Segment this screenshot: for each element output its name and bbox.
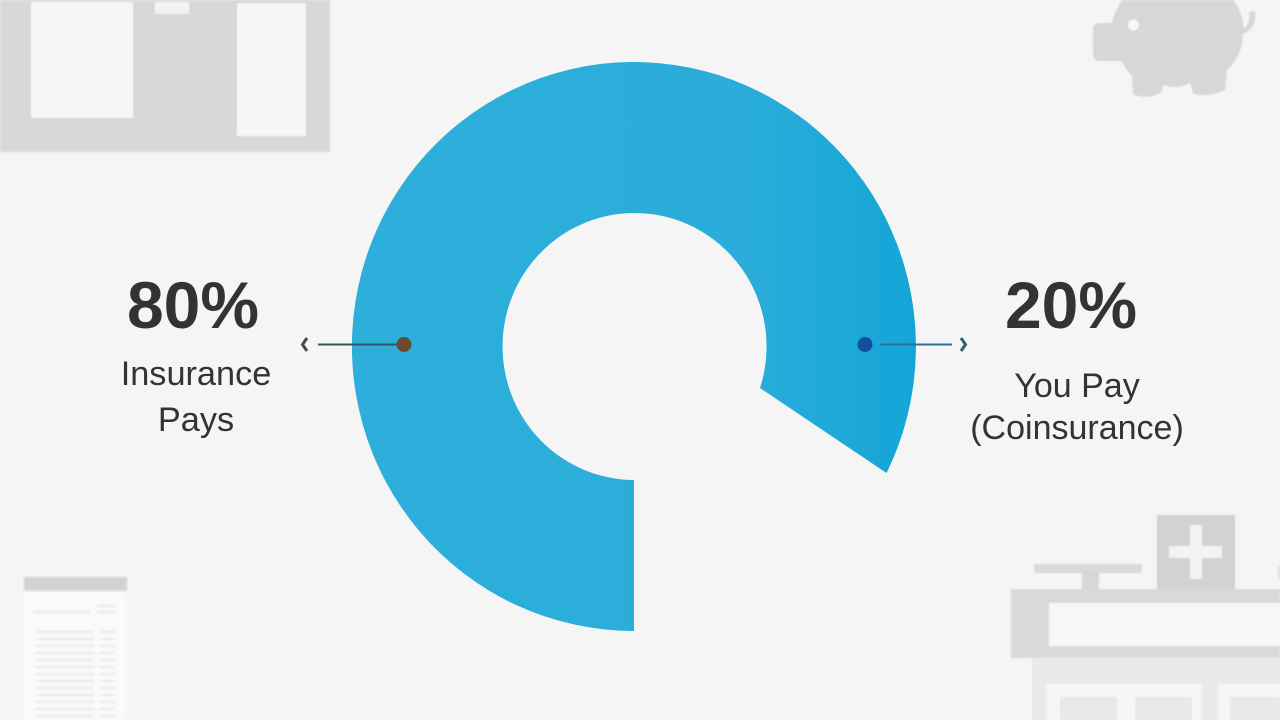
- callout: right leader line: [858, 337, 966, 352]
- label: You Pay (Coinsurance): (Coinsurance): [970, 409, 1184, 447]
- segment: insurance pays 80%: [352, 62, 916, 631]
- label: Insurance Pays: [121, 355, 271, 439]
- label: You Pay (Coinsurance): [970, 367, 1184, 447]
- donut chart: [352, 62, 916, 631]
- callout: left leader line: [302, 337, 412, 352]
- label: Insurance Pays: Insurance: [121, 355, 271, 393]
- label: 80 percent: 80%: [127, 268, 259, 342]
- icon: building top-left: [0, 0, 330, 152]
- icon: piggy bank: [1093, 0, 1255, 97]
- label: 20 percent: 20%: [1005, 268, 1137, 342]
- label: You Pay (Coinsurance): You Pay: [1014, 367, 1140, 405]
- icon: hospital building: [1011, 515, 1280, 720]
- label: Insurance Pays: Pays: [158, 401, 234, 439]
- icon: medical bill document: [24, 577, 127, 720]
